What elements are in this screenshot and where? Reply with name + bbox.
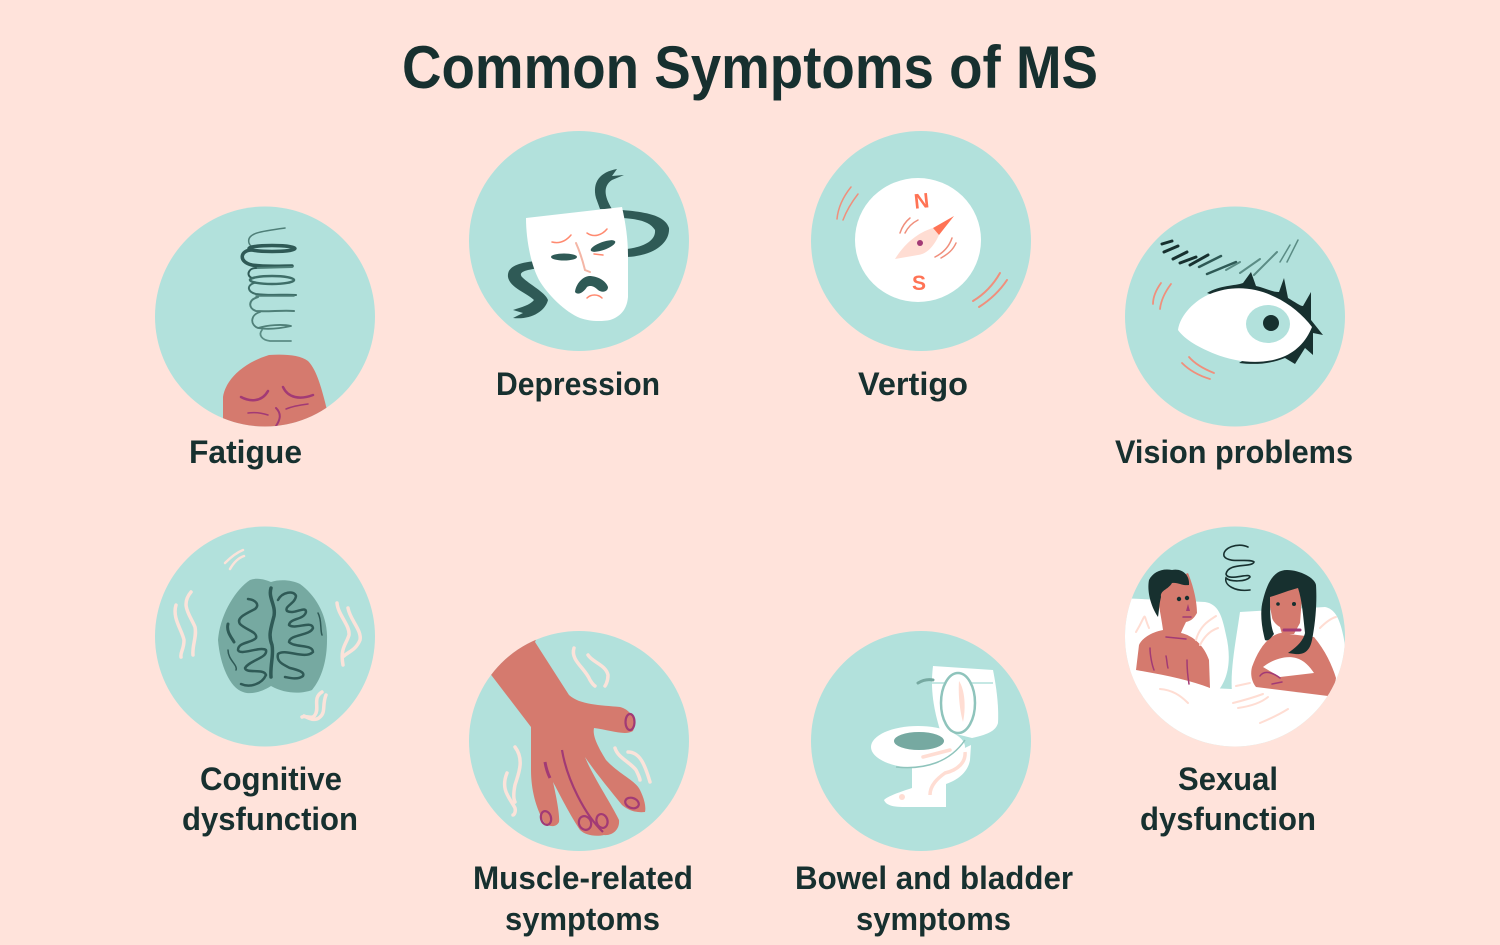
label: Sexual dysfunction: dysfunction — [1140, 801, 1316, 837]
label: Vision problems: Vision problems — [1115, 434, 1353, 470]
label: Muscle-related symptoms: symptoms — [505, 901, 660, 937]
label: Bowel and bladder symptoms — [795, 860, 1073, 937]
icon: strained eye with brow — [1153, 240, 1323, 379]
teal circle: sexual — [1125, 526, 1345, 746]
label: Cognitive dysfunction: Cognitive — [200, 761, 342, 797]
teal circle: vertigo — [811, 131, 1031, 351]
panel: vision problems — [1115, 206, 1353, 470]
label: Sexual dysfunction: Sexual — [1178, 761, 1278, 797]
teal circle: bowel — [811, 631, 1031, 851]
icon: toilet — [871, 666, 998, 807]
label: Muscle-related symptoms — [473, 860, 693, 937]
label: Bowel and bladder symptoms: Bowel and bladder — [795, 860, 1073, 896]
label: Cognitive dysfunction — [182, 761, 358, 837]
icon: tired head with spring — [223, 228, 330, 440]
panel: vertigo — [811, 131, 1031, 402]
panel: bowel and bladder symptoms — [795, 631, 1073, 937]
label: Bowel and bladder symptoms: symptoms — [856, 901, 1011, 937]
label: Sexual dysfunction — [1140, 761, 1316, 837]
panel: cognitive dysfunction — [155, 526, 375, 837]
label: Cognitive dysfunction: dysfunction — [182, 801, 358, 837]
icon: compass: N — [913, 189, 930, 214]
icon: twitching hand — [480, 630, 650, 836]
panel: sexual dysfunction — [1120, 526, 1350, 837]
label: Fatigue: Fatigue — [189, 434, 302, 470]
label: Muscle-related symptoms: Muscle-related — [473, 860, 693, 896]
icon: compass: S — [912, 272, 926, 295]
title: Common Symptoms of MS — [402, 34, 1098, 101]
icon: compass — [837, 178, 1007, 307]
panel: depression — [469, 131, 689, 402]
teal circle: muscle — [469, 631, 689, 851]
panel: fatigue — [155, 206, 375, 470]
label: Vertigo: Vertigo — [858, 366, 968, 402]
teal circle: vision — [1125, 206, 1345, 426]
icon: couple in bed — [1120, 545, 1350, 750]
teal circle: fatigue — [155, 206, 375, 426]
teal circle: depression — [469, 131, 689, 351]
panel: muscle-related symptoms — [469, 630, 693, 937]
icon: brain with wisps — [175, 550, 360, 719]
label: Depression: Depression — [496, 366, 660, 402]
icon: sad theatre mask — [508, 169, 669, 321]
teal circle: cognitive — [155, 526, 375, 746]
